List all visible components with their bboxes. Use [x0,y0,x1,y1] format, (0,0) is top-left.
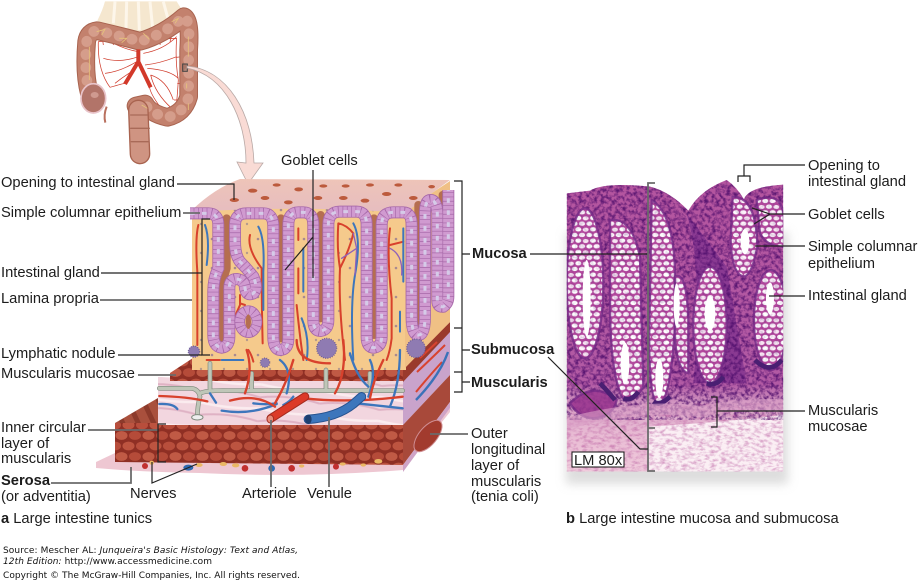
right side faces [403,322,450,472]
leader: opening [177,184,234,200]
label: outer longitudinal layer: muscularis [471,474,541,490]
source credit [3,546,300,581]
label: simple columnar epithelium: Simple columnar epithelium [1,205,181,221]
label: opening right: Opening to [808,158,880,174]
leader: nerves [152,462,197,483]
source credit: 12th Edition: http://www.accessmedicine.com [3,557,212,567]
nerves on colon [89,18,188,110]
leader: venule [328,417,330,487]
lower texture [567,403,783,472]
label: inner circular layer: Inner circular [1,420,86,436]
crypt bases [600,360,782,403]
label: venule: Venule [307,486,352,502]
caption b: b Large intestine mucosa and submucosa [566,511,840,527]
leader: gland right [769,295,805,297]
muscularis front [115,423,403,465]
label: mucosa: Mucosa [472,246,528,262]
serosa [96,408,450,475]
gland ring section [240,311,257,333]
crypt glands [188,190,448,367]
lower connective zone [647,415,783,472]
epithelium layer [190,190,448,350]
label: serosa: Serosa [1,473,51,489]
right labels [808,158,917,435]
small red vessels [159,340,403,407]
label: muscularis mucosae: Muscularis mucosae [1,366,135,382]
leader: arteriole [270,420,272,487]
venule [308,397,362,419]
leader: epithelium [183,212,200,214]
leader: epithelium right [755,245,805,247]
small blue vessels [159,350,403,412]
leader: goblet cells [285,170,313,278]
bracket: submucosa and muscularis [454,328,470,392]
gland pits [230,183,435,204]
label: muscularis: Muscularis [471,375,548,391]
cecum opening [81,84,106,113]
arrow from colon to tissue block [187,66,263,184]
label: nerves: Nerves [130,486,177,502]
label: gland right: Intestinal gland [808,288,907,304]
label: muscularis mucosae right: Muscularis [808,403,878,419]
sample marker box [183,64,187,71]
mesentery fan [97,1,186,39]
leader: lymphatic nodule [118,354,202,356]
label: arteriole: Arteriole [242,486,297,502]
muscularis mucosae band [567,405,783,423]
label: epithelium right: Simple columnar [808,239,917,255]
leader: submucosa [548,357,648,449]
label: outer longitudinal layer: longitudinal [471,442,545,458]
colon overview illustration [81,1,189,154]
arterial arcades [98,36,184,115]
label: opening right: intestinal gland [808,174,906,190]
side vessels [416,342,445,392]
panel b: micrograph [566,180,788,484]
serosa vessels and nerves [142,459,382,472]
source credit: Copyright © The McGraw-Hill Companies, Inc. All rights reserved. [3,571,300,581]
leader and bracket: intestinal gland [101,219,210,355]
texture [567,180,783,420]
micrograph shadow [566,232,788,484]
label: outer longitudinal layer: layer of [471,458,520,474]
leader: lamina propria [100,299,192,301]
top surface [192,179,450,213]
leader: serosa [51,467,131,483]
tone overlay on glands [567,180,783,420]
leader: muscularis mucosae right [711,397,805,427]
muscularis long layer top [115,398,158,426]
crypt lumens [222,195,443,338]
label: inner circular layer: layer of [1,436,50,452]
submucosa vessels [159,340,403,424]
label: epithelium right: epithelium [808,256,875,272]
crypt glands [567,197,787,418]
label: outer longitudinal layer: (tenia coli) [471,489,539,505]
dense crypt stroma [687,213,747,383]
leader: outer longitudinal [430,433,468,435]
left labels and leader lines [1,153,545,505]
label: goblet right: Goblet cells [808,207,885,223]
tunic brackets [454,181,555,392]
label: muscularis mucosae right: mucosae [808,419,868,435]
source credit: Source: Mescher AL: Junqueira's Basic Histology: Text and Atlas, [3,546,298,556]
label: lymphatic nodule: Lymphatic nodule [1,346,116,362]
bracket: mucosa [454,181,470,372]
bracket: micrograph tunics [648,183,655,471]
leader and bracket: inner circular [88,429,158,431]
lamina propria front [192,208,406,370]
leader: muscularis mucosae [138,374,176,376]
muscularis mucosae [170,358,405,381]
label: lamina propria: Lamina propria [1,291,100,307]
lymph and blood vessels in lamina [196,223,403,362]
leader: goblet right [752,208,805,224]
label: goblet cells: Goblet cells [281,153,358,169]
appendix [105,107,107,123]
label: inner circular layer: muscularis [1,451,71,467]
tenia coli [409,416,447,456]
lymphatic nodules [188,338,425,367]
panel a: tissue block [96,179,450,475]
gland lumens [583,229,774,398]
colon body [86,17,189,154]
lymph vessel [159,363,403,417]
arteriole [271,397,305,418]
leader: mucosa [530,253,648,255]
caption a: a Large intestine tunics [1,511,152,527]
micrograph leaders [530,165,805,471]
LM scale box: LM 80x [574,453,623,469]
label: opening to intestinal gland: Opening to intestinal gland [1,175,175,191]
label: serosa: (or adventitia) [1,489,91,505]
right mucosa face [405,181,450,368]
submucosa front [158,377,403,425]
label: outer longitudinal layer: Outer [471,426,508,442]
leader: opening right [738,165,805,182]
superior arteries trunk [125,49,151,87]
label: intestinal gland: Intestinal gland [1,265,100,281]
label: submucosa: Submucosa [471,342,555,358]
micrograph tissue [567,180,787,472]
bracket: inner circular [158,424,166,462]
